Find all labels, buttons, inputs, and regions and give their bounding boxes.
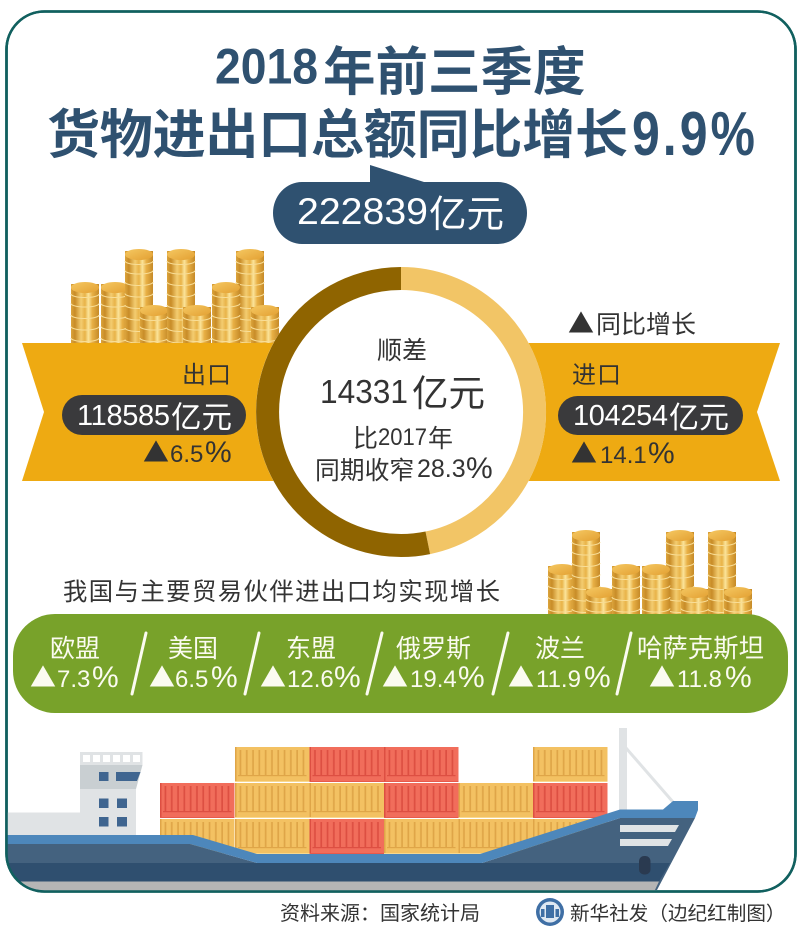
partner: USA: % [211,661,238,694]
surplus text [315,337,493,485]
surplus text: 年 [428,425,453,453]
title: 9.9% [632,99,755,168]
partner: ASEAN: ▲ [260,658,286,695]
surplus text: 14331 [320,373,408,410]
partner: Russia: % [458,661,485,694]
icon: Xinhua emblem [536,898,564,926]
export value pill: 亿元 [171,401,232,435]
export growth: ▲ [143,433,169,470]
partner: Poland: ▲ [508,658,534,695]
donut chart: trade surplus [256,267,546,557]
icon: coin stacks right [548,530,752,636]
import value pill: 亿元 [669,402,729,435]
partner: Kazakhstan: 11.8 [677,666,722,693]
partner: ASEAN [260,635,361,695]
import value pill: 104254 [573,400,668,432]
total value callout: 222839 [297,191,428,232]
partner: Kazakhstan: ▲ [649,658,675,695]
legend: year-on-year growth: 同比增长 [596,311,696,339]
illustration: container ship [0,728,698,892]
import growth: % [648,437,675,470]
partner: Poland: 11.9 [536,666,581,693]
import growth: 14.1 [600,442,647,469]
heading: trading partners: 我国与主要贸易伙伴进出口均实现增长 [63,579,500,606]
import growth: ▲ [571,434,597,471]
partner: Poland: % [584,661,611,694]
partner: EU: 7.3 [57,666,90,693]
partner: Russia: 19.4 [410,666,457,693]
surplus text: 同期收窄 [315,457,414,485]
import label: 进口 [572,362,621,389]
partner: USA [149,635,238,695]
surplus text: 顺差 [377,337,427,365]
partner: ASEAN: % [334,661,361,694]
export value pill: 118585 [77,400,170,432]
export growth: % [205,436,232,469]
credit: 新华社发（边纪红制图） [570,903,786,925]
panel: trading partners [13,614,788,713]
ship superstructure [0,752,142,836]
partner: USA: 6.5 [175,666,208,693]
partner: USA: 美国 [168,635,218,663]
partner: Poland: 波兰 [535,635,585,663]
mast [619,728,673,812]
partner: Russia: ▲ [382,658,408,695]
export value pill [62,395,246,435]
partner: EU: ▲ [30,658,56,695]
surplus text: 2017 [378,424,427,451]
panel: export ribbon [22,343,300,481]
hull [0,801,698,892]
partner: ASEAN: 东盟 [286,635,336,663]
import value pill [558,396,743,435]
partner: Kazakhstan: 哈萨克斯坦 [637,635,764,663]
surplus text: % [466,452,493,485]
panel: import ribbon [500,343,780,481]
surplus text: 比 [353,425,378,453]
containers [160,747,608,854]
surplus text: 28.3 [417,455,466,483]
title: 货物进出口总额同比增长 [47,106,628,165]
total value callout [273,165,527,244]
surplus text: 亿元 [412,373,485,414]
source note: 资料来源：国家统计局 [280,902,480,925]
partner: ASEAN: 12.6 [287,666,334,693]
export label: 出口 [182,362,231,389]
partner: Kazakhstan [637,635,764,695]
partner: EU: 欧盟 [50,635,100,663]
export growth: 6.5 [170,441,203,468]
partner: Russia [382,635,485,695]
legend: year-on-year growth: ▲ [568,304,594,341]
partner: Russia: 俄罗斯 [396,635,471,663]
total value callout: 亿元 [429,193,504,235]
title: 年前三季度 [323,43,586,102]
partner: USA: ▲ [149,658,175,695]
partner: EU: % [92,661,119,694]
icon: coin stacks left [71,249,279,354]
partner: Kazakhstan: % [725,661,752,694]
partner: Poland [508,635,611,695]
title [47,38,755,168]
title: 2018 [215,38,318,94]
partner: EU [30,635,119,695]
